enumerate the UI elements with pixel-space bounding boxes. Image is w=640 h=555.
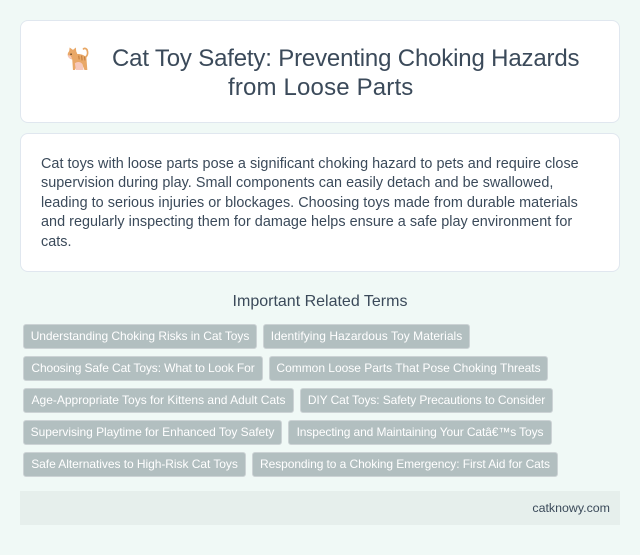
icon: cat [68,48,88,70]
tag: Supervising Playtime for Enhanced Toy Safety [31,425,274,439]
title: Cat Toy Safety: Preventing Choking Hazards [112,45,579,72]
tag [288,420,552,445]
tag [269,356,548,381]
footer site name: catknowy.com [532,501,610,515]
tag [23,388,294,413]
tag [23,452,246,477]
paragraph text: and regularly inspecting them for damage helps ensure a safe play environment for [41,214,572,230]
tag: Age-Appropriate Toys for Kittens and Adult Cats [32,393,285,407]
tag [23,420,282,445]
footer bar [20,491,620,525]
tag [23,356,263,381]
tag: Common Loose Parts That Pose Choking Threats [276,361,541,375]
tag [252,452,558,477]
paragraph text [41,156,579,250]
tag: Identifying Hazardous Toy Materials [271,329,462,343]
tag: Inspecting and Maintaining Your Catâ€™s Toys [297,425,543,439]
tag: Responding to a Choking Emergency: First Aid for Cats [260,457,550,471]
paragraph text: Cat toys with loose parts pose a significant choking hazard to pets and require close [41,156,579,172]
paragraph text: cats. [41,234,72,250]
tag [263,324,470,349]
related terms tags [23,324,558,477]
paragraph text: leading to serious injuries or blockages. Choosing toys made from durable materials [41,194,578,210]
tag: Understanding Choking Risks in Cat Toys [31,329,249,343]
tag: DIY Cat Toys: Safety Precautions to Consider [308,393,545,407]
title: from Loose Parts [228,74,413,101]
related terms heading: Important Related Terms [233,293,407,310]
paragraph text: supervision during play. Small components can easily detach and be swallowed, [41,175,553,191]
tag: Safe Alternatives to High-Risk Cat Toys [31,457,238,471]
intro paragraph card [20,133,620,272]
header card [20,20,620,123]
tag [23,324,257,349]
tag [300,388,553,413]
title [112,45,579,101]
tag: Choosing Safe Cat Toys: What to Look For [31,361,255,375]
